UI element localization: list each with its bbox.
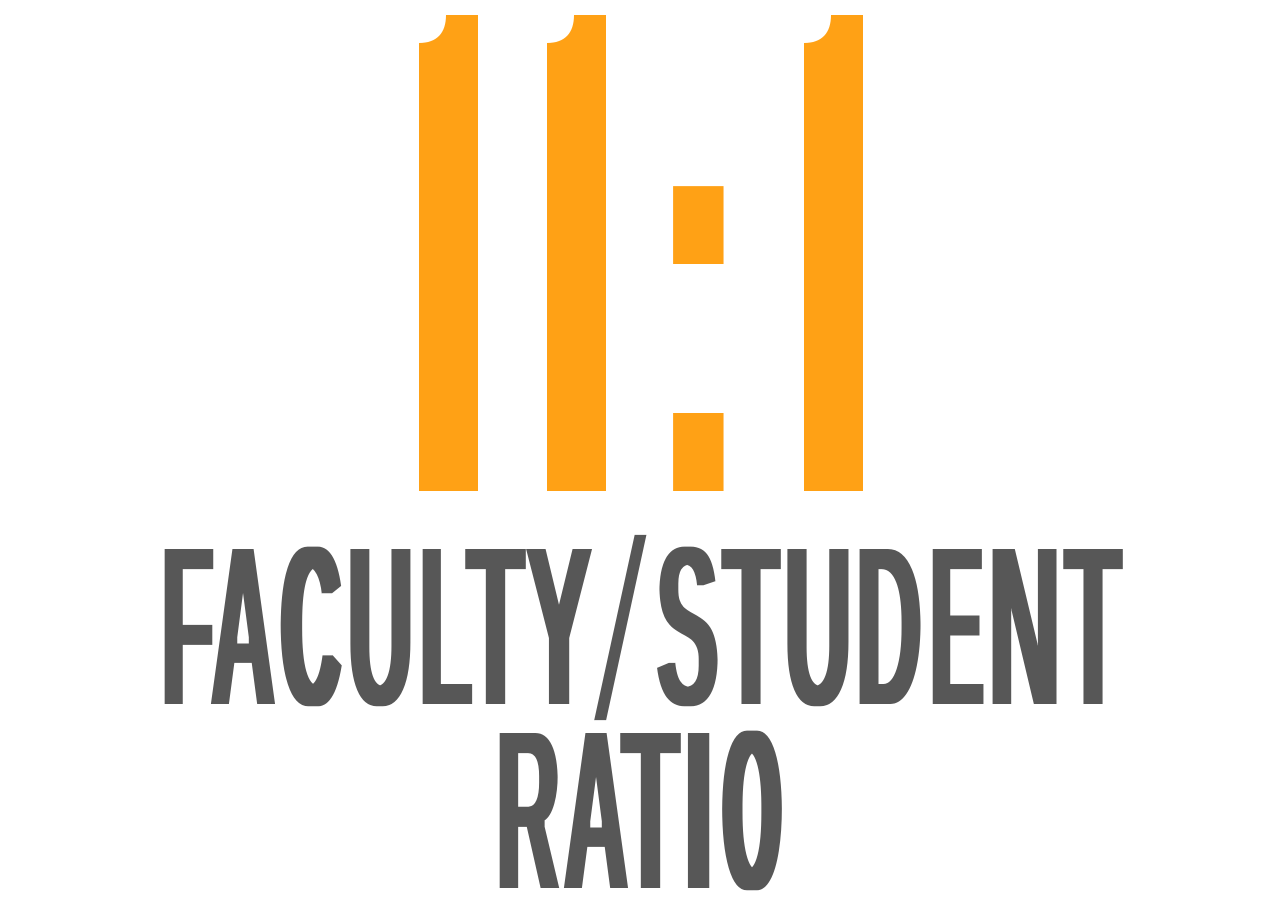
big ratio number: 11:1	[419, 15, 863, 491]
title line 1: FACULTY/STUDENT: Y	[526, 496, 592, 758]
title line 1: FACULTY/STUDENT: N	[989, 496, 1060, 758]
title line 1: FACULTY/STUDENT: C	[282, 497, 340, 758]
title line 1: FACULTY/STUDENT: T	[1065, 495, 1121, 757]
title line 1: FACULTY/STUDENT: U	[348, 496, 413, 757]
infographic canvas	[164, 15, 1123, 890]
title: Faculty/Student Ratio	[162, 487, 1121, 900]
title line 2: RATIO	[497, 679, 780, 900]
title line 1: FACULTY/STUDENT: D	[857, 496, 921, 757]
title line 1: FACULTY/STUDENT: S	[657, 495, 718, 757]
title line 1: FACULTY/STUDENT: T	[723, 495, 779, 757]
title line 1: FACULTY/STUDENT	[162, 487, 1121, 774]
title line 1: FACULTY/STUDENT: T	[467, 495, 524, 757]
title line 1: FACULTY/STUDENT: /	[587, 487, 653, 774]
title line 1: FACULTY/STUDENT: A	[211, 496, 275, 757]
title line 1: FACULTY/STUDENT: U	[785, 495, 851, 757]
title line 1: FACULTY/STUDENT: F	[162, 497, 213, 758]
title line 1: FACULTY/STUDENT: E	[930, 497, 984, 758]
title line 1: FACULTY/STUDENT: L	[420, 497, 472, 758]
